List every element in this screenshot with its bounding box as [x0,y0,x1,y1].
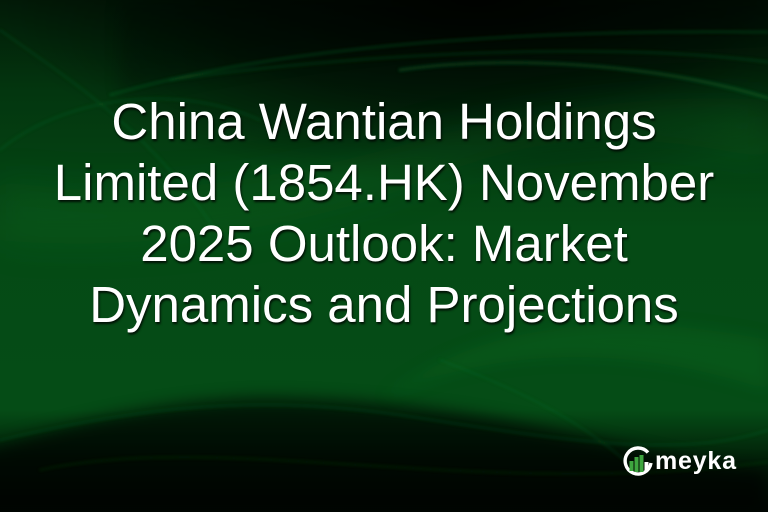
title: China Wantian Holdings [111,93,657,150]
icon: ring with bars [623,446,653,476]
title: Limited (1854.HK) November [54,154,714,211]
logo: meyka [623,446,737,476]
title: 2025 Outlook: Market [140,215,628,272]
wordmark: meyka [655,447,737,475]
title [54,93,716,336]
title: Dynamics and Projections [89,276,679,333]
